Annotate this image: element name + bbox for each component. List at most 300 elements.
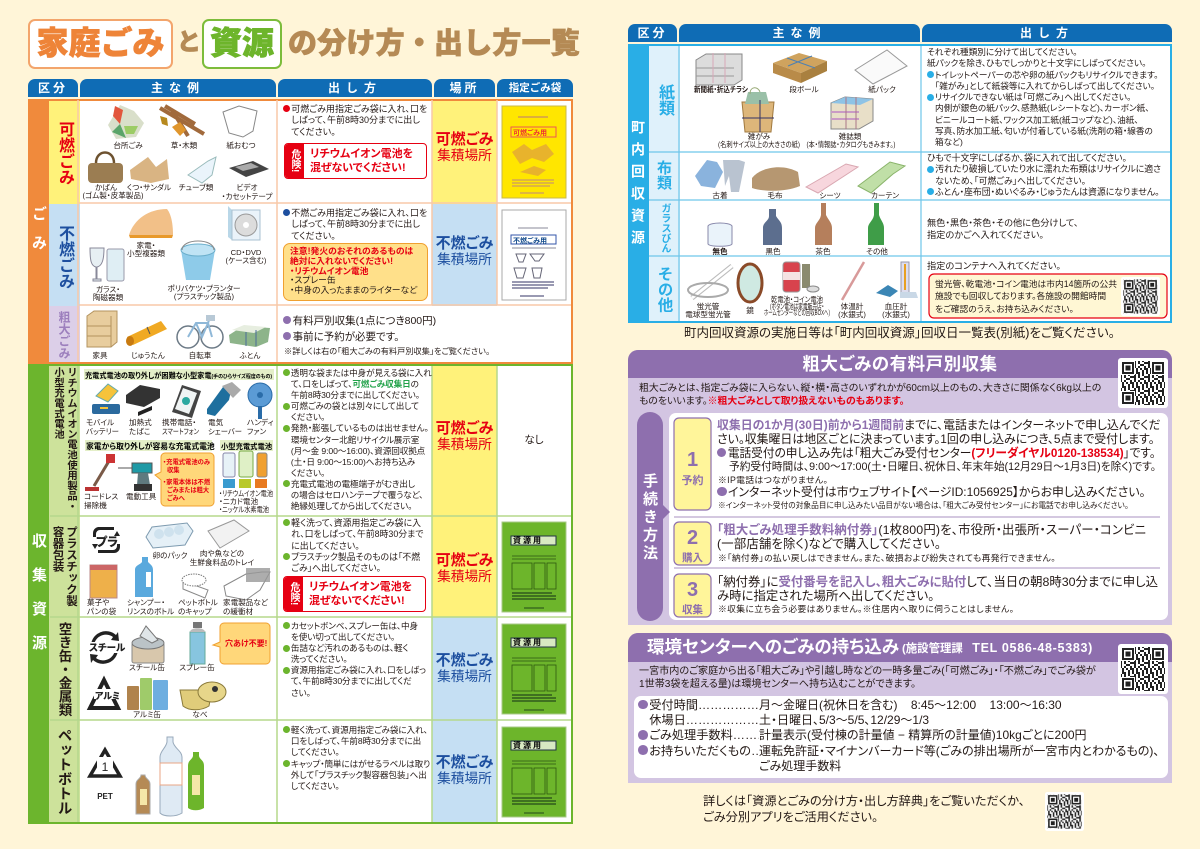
icon: steel mark <box>88 631 126 664</box>
place: plastic <box>436 552 493 584</box>
method: lithium: 絶縁処理してから出してください。 <box>291 501 412 511</box>
method: paper: 紙パックを除き、ひもでしっかりと十文字にしばってください。 <box>927 58 1146 68</box>
step 3 box <box>674 574 711 617</box>
illustration: carpet <box>126 321 167 360</box>
place: cans: 集積場所 <box>437 669 492 684</box>
illustration: kitchen waste <box>108 105 144 150</box>
warning: lithium <box>284 143 427 179</box>
caution box: ・スプレー缶 <box>290 275 336 285</box>
callout: rechargeable battery note: ・家電本体は不燃 <box>163 477 211 486</box>
step 3 note: ※収集に立ち会う必要はありません。※住居内へ取りに伺うことはしません。 <box>718 604 1014 614</box>
illustration: furniture <box>87 311 117 360</box>
illustration: mirror <box>738 264 762 315</box>
illustration: green glass bottle <box>866 203 888 256</box>
illustration: fluorescent tube <box>685 266 732 319</box>
bag: resource cans <box>502 624 566 714</box>
step 2 text <box>717 523 1146 551</box>
note: schedule: 町内回収資源の実施日等は「町内回収資源」回収日一覧表(別紙)をご覧ください。 <box>684 326 1115 340</box>
method: cans: を使い切って出してください。 <box>291 632 395 642</box>
label cell: oversized <box>49 306 80 362</box>
icon: steel mark: スチール <box>89 643 126 654</box>
method: lithium: ください。 <box>291 468 325 478</box>
callout text: fluorescent: 蛍光管、乾電池・コイン電池は市内14箇所の公共 <box>935 279 1117 289</box>
header: examples <box>679 24 920 42</box>
illustration: shampoo bottle: シャンプー・ <box>127 598 165 607</box>
illustration: futon <box>229 325 270 360</box>
place cell: plastic <box>432 516 497 617</box>
header: examples <box>80 79 276 97</box>
method: glass: 指定のかごへ入れてください。 <box>927 230 1044 240</box>
header bar <box>628 633 1172 662</box>
header: category: 区分 <box>637 26 668 40</box>
step 1 ip note: ※IP電話はつながりません。 <box>718 475 828 485</box>
text: oversized definition: ものをいいます。※粗大ごみとして取り扱えないものもあります。 <box>639 396 904 407</box>
header: bag <box>497 79 573 97</box>
step 2 box: 2 <box>687 527 698 549</box>
illustration: videotape: ・カセットテープ <box>222 192 273 201</box>
bag: resource pet: 資源用 <box>513 740 543 750</box>
procedure pill <box>637 412 663 621</box>
illustration: glass: ガラス・ <box>96 284 120 294</box>
header: category <box>628 24 677 42</box>
method: lithium: 午前8時30分までに出してください。 <box>291 390 420 400</box>
label cell: burnable <box>49 101 80 204</box>
method: plastic <box>283 518 424 573</box>
illustration: mobile battery: バッテリー <box>86 427 119 436</box>
callout: rechargeable battery note: 収集 <box>167 465 180 474</box>
title: and: と <box>177 29 201 56</box>
method: glass <box>927 218 1078 240</box>
method: cans: カセットボンベ、スプレー缶は、中身 <box>291 621 418 631</box>
illustration: bicycle: 自転車 <box>189 350 212 360</box>
illustration: newspaper: 新聞紙・折込チラシ <box>694 84 749 94</box>
illustration: sheets: シーツ <box>819 191 841 200</box>
right table header <box>628 24 1172 42</box>
illustration: mirror: 鏡 <box>746 305 754 315</box>
callout: fluorescent tubes note <box>929 274 1167 318</box>
illustration: thermometer: 体温計 <box>841 301 864 311</box>
procedure arrow <box>663 505 670 519</box>
place: non-burnable: 不燃ごみ <box>436 235 493 252</box>
method: lithium: (月〜金 9:00〜16:00)、資源回収拠点 <box>291 446 425 456</box>
illustration: magazines: (本・情報誌・カタログもきみます。) <box>806 139 896 149</box>
step 2 text: 「粗大ごみ処理手数料納付券」(1枚800円)を、市役所・出張所・スーパー・コンビニ <box>717 523 1146 537</box>
illustration: thermometer <box>838 262 866 319</box>
text: environment detail values: ごみ処理手数料 <box>759 759 841 773</box>
panel: oversized collection <box>628 350 1172 625</box>
warning tag: 危険! <box>288 582 299 606</box>
illustration: blanket: 毛布 <box>767 190 783 200</box>
illustration: shaver: シェーバー <box>208 427 242 436</box>
text: environment detail values: 運転免許証・マイナンバーカード等(ごみの排出場所が一宮市内とわかるもの)、 <box>759 744 1159 758</box>
header: examples: 主な例 <box>151 81 205 95</box>
lithium: subheading 3: 小型充電式電池 <box>221 442 273 451</box>
qr: app <box>1045 792 1084 831</box>
label cell: non-burnable <box>49 204 80 306</box>
bag: non-burnable <box>502 210 566 300</box>
method: cloth: ふとん・座布団・ぬいぐるみ・じゅうたんは資源になりません。 <box>935 187 1160 197</box>
header: place <box>434 79 495 97</box>
method: lithium: 可燃ごみの袋とは別々にして出して <box>291 401 419 411</box>
method: paper: 箱など) <box>935 137 963 147</box>
method: oversized: 事前に予約が必要です。 <box>293 331 399 343</box>
method: cans: 資源用指定ごみ袋に入れ、口をしばっ <box>291 665 426 675</box>
illustration: bucket: ポリバケツ・プランター <box>167 284 241 293</box>
icon: aluminium mark: アルミ <box>95 691 120 701</box>
method: cans: さい。 <box>291 688 311 698</box>
text: oversized definition <box>639 382 1101 407</box>
band: neighbourhood <box>628 44 650 323</box>
step 2 note: ※「納付券」の払い戻しはできません。また、破損および紛失されても再発行できません。 <box>718 553 1056 563</box>
header: examples: 主な例 <box>772 26 826 40</box>
illustration: old clothes: 古着 <box>712 190 728 200</box>
illustration: pet caps: ペットボトル <box>178 598 218 607</box>
text: environment detail values: 月〜金曜日(祝休日を含む) 8:45〜12:00 13:00〜16:30 <box>759 698 1062 712</box>
vertical label: glass: ガラスびん <box>659 203 670 253</box>
caution box: ・中身の入ったままのライターなど <box>290 285 417 295</box>
illustration: black glass bottle: 黒色 <box>765 246 781 256</box>
vertical label: plastic: 容器包装 <box>52 526 64 572</box>
method: non-burnable: 不燃ごみ用指定ごみ袋に入れ、口を <box>291 208 427 218</box>
method: cloth <box>927 153 1161 197</box>
illustration: food tray: 生鮮食料品のトレイ <box>190 557 254 567</box>
illustration: misc paper: 雑がみ <box>748 131 771 141</box>
text: environment intro: 一宮市内のご家庭から出る「粗大ごみ」や引越し時などの一時多量ごみ(「可燃ごみ」・「不燃ごみ」でごみ袋が <box>639 666 1096 677</box>
illustration: diaper <box>223 106 257 150</box>
caution box <box>283 243 428 301</box>
illustration: videotape: ビデオ <box>236 182 258 192</box>
bag: non-burnable: 不燃ごみ用 <box>513 236 547 245</box>
vertical label: neighbourhood: 町内回収資源 <box>630 120 646 252</box>
title <box>28 19 580 69</box>
illustration: aluminium cans: アルミ缶 <box>133 709 161 719</box>
header: how <box>922 24 1172 42</box>
title: household waste box: 家庭ごみ <box>36 25 164 61</box>
icon: PET mark <box>90 750 120 801</box>
heading: oversized: 粗大ごみの有料戸別収集 <box>802 354 998 374</box>
method: lithium: 透明な袋または中身が見える袋に入れ <box>291 368 432 378</box>
illustration: mobile battery: モバイル <box>86 418 115 427</box>
illustration: CD: CD・DVD <box>231 248 262 257</box>
illustration: pet caps: のキャップ <box>178 607 212 616</box>
illustration: newspaper <box>694 53 749 94</box>
heading: environment center: 環境センターへのごみの持ち込み <box>647 637 899 657</box>
illustration: videotape <box>222 161 273 201</box>
callout text: fluorescent <box>935 279 1117 314</box>
method: paper: 「雑がみ」として紙袋等に入れてからしばって出してください。 <box>935 81 1155 91</box>
illustration: magazines <box>806 97 896 149</box>
warning tag <box>283 576 303 612</box>
callout: rechargeable battery note <box>155 453 214 506</box>
method: pet: してください。 <box>291 747 340 757</box>
illustration: misc paper <box>718 88 800 149</box>
method: lithium <box>283 368 432 511</box>
vertical label: garbage: ごみ <box>30 206 47 264</box>
illustration: shampoo bottle: リンスのボトル <box>127 607 175 616</box>
illustration: brown glass bottle: 茶色 <box>815 246 831 256</box>
warning tag <box>284 143 304 179</box>
band: garbage <box>28 99 50 364</box>
illustration: handy fan <box>247 383 273 436</box>
header: place: 場所 <box>449 81 480 95</box>
step 3 text: 「納付券」に受付番号を記入し、粗大ごみに貼付して、当日の朝8時30分までに申し込 <box>717 575 1158 589</box>
callout text: fluorescent: をご確認のうえ、お持ち込みください。 <box>935 304 1074 314</box>
method: lithium: 発熱・膨張しているものは出せません。 <box>291 423 429 433</box>
method: paper: 内側が銀色の紙パック、感熱紙(レシートなど)、カーボン紙、 <box>935 103 1150 113</box>
place: burnable <box>436 131 493 163</box>
method: plastic: に出してください。 <box>291 541 360 551</box>
text: environment detail values <box>759 698 1159 773</box>
illustration: tube <box>178 157 216 192</box>
place: burnable: 可燃ごみ <box>436 131 493 148</box>
illustration: pet bottles <box>136 737 204 816</box>
illustration: blanket <box>752 167 800 200</box>
header: bag: 指定ごみ袋 <box>509 82 561 94</box>
illustration: magazines: 雑誌類 <box>839 131 862 141</box>
illustration: small batteries: ・ニカド電池 <box>219 496 258 506</box>
illustration: kitchen waste: 台所ごみ <box>113 140 143 150</box>
place cell: burnable <box>432 101 497 204</box>
step 1 hours: 予約受付時間は、9:00〜17:00(土・日曜日、祝休日、年末年始(12月29日〜1月3日)を除く)です。 <box>729 461 1156 473</box>
illustration: snack bag: 菓子や <box>87 597 109 607</box>
illustration: clear glass bottle: 無色 <box>712 246 728 256</box>
bag: resource cans: 資源用 <box>513 637 543 647</box>
illustration: cardboard <box>773 53 827 94</box>
place: lithium <box>436 420 493 452</box>
place: lithium: 可燃ごみ <box>436 420 493 437</box>
step 1 text <box>717 418 1161 446</box>
header: how <box>278 79 432 97</box>
illustration: small batteries: ・ニッケル水素電池 <box>219 504 269 514</box>
illustration: smartphone: 携帯電話・ <box>162 417 196 427</box>
illustration: glass: 陶磁器類 <box>93 292 124 302</box>
method: plastic: れ、口をしばって、午前8時30分まで <box>291 529 424 539</box>
illustration: brown glass bottle <box>815 203 832 256</box>
step 1 internet: インターネット受付は市ウェブサイト【ページID:1056925】からお申し込みください。 <box>728 485 1146 499</box>
place cell: non-burnable <box>432 204 497 306</box>
place cell: lithium <box>432 366 497 516</box>
method: paper <box>927 47 1158 147</box>
method: pet: キャップ・簡単にはがせるラベルは取り <box>291 759 430 769</box>
panel: resources section <box>28 364 573 824</box>
illustration: small batteries <box>219 451 273 514</box>
header: category: 区分 <box>38 81 68 95</box>
illustration: old clothes <box>695 160 745 200</box>
illustration: clear glass bottle <box>708 223 732 256</box>
method: paper: ビニールコート紙、ワックス加工紙(紙コップなど)、油紙、 <box>935 115 1139 125</box>
place: pet: 不燃ごみ <box>436 754 493 771</box>
method: pet: 口をしばって、午前8時30分までに出 <box>291 736 421 746</box>
illustration: blood pressure meter: 血圧計 <box>885 301 908 311</box>
illustration: snack bag <box>87 565 117 616</box>
method: non-burnable: てください。 <box>291 231 336 241</box>
illustration: aluminium cans <box>127 678 168 719</box>
vertical label: cans: 空き缶・金属類 <box>56 622 72 716</box>
step 3 box: 収集 <box>682 603 703 616</box>
method: other: 指定のコンテナへ入れてください。 <box>927 261 1061 271</box>
place: pet: 集積場所 <box>437 771 492 786</box>
illustration: misc paper: (名刺サイズ以上の大きさの紙) <box>718 139 800 149</box>
place: pet <box>436 754 493 786</box>
illustration: CD: (ケース含む) <box>226 256 267 265</box>
label cell: resources <box>49 366 80 822</box>
place: plastic: 集積場所 <box>437 569 492 584</box>
step 1 box: 1 <box>687 449 698 471</box>
illustration: pot <box>180 682 226 719</box>
vertical label: paper: 紙類 <box>656 84 673 116</box>
method: lithium: 環境センター北館リサイクル展示室 <box>291 435 419 445</box>
band: resources <box>28 364 50 824</box>
text: environment detail values: 土・日曜日、5/3〜5/5、12/29〜1/3 <box>759 713 929 727</box>
illustration: blood pressure meter: (水銀式) <box>882 309 910 319</box>
heading: contact: (施設管理課 TEL 0586-48-5383) <box>902 641 1093 655</box>
method: pet <box>283 725 430 791</box>
illustration: spray can <box>179 622 215 672</box>
method: non-burnable <box>283 208 427 241</box>
illustration: cordless cleaner: コードレス <box>84 492 118 501</box>
illustration: batteries: ホームセンターなどの回収BOXへ) <box>764 308 830 317</box>
callout: rechargeable battery note: ごみへ <box>167 493 186 502</box>
lithium: subheading 1: 充電式電池の取り外しが困難な小型家電(手のひらサイズ程度のもの) <box>85 370 272 380</box>
header: category <box>28 79 78 97</box>
method: oversized <box>283 315 436 343</box>
illustration: egg carton: 卵のパック <box>153 550 187 560</box>
illustration: cordless cleaner <box>84 454 118 510</box>
method: pet: 軽く洗って、資源用指定ごみ袋に入れ、 <box>291 725 428 735</box>
vertical label: lithium: 小型充電式電池 <box>52 367 63 439</box>
step 1 text: 収集日の1か月(30日)前から1週間前までに、電話またはインターネットで申し込んでくだ <box>717 418 1161 432</box>
caution box: ・リチウムイオン電池 <box>290 266 368 276</box>
footer text: 詳しくは「資源とごみの分け方・出し方辞典」をご覧いただくか、 <box>703 794 1025 808</box>
text: environment detail labels <box>638 698 759 758</box>
illustration: packing material: 家電製品など <box>223 597 269 607</box>
illustration: cardboard: 段ボール <box>789 85 819 94</box>
icon: PET mark: PET <box>97 792 113 801</box>
illustration: pot: なべ <box>192 710 208 719</box>
illustration: smartphone <box>162 385 201 436</box>
illustration: food tray <box>190 520 254 567</box>
illustration: food tray: 肉や魚などの <box>200 548 244 558</box>
method: plastic: ごみ」へ出してください。 <box>291 563 381 573</box>
vertical label: plastic <box>52 526 78 606</box>
illustration: handy fan: ハンディ <box>247 417 273 427</box>
method: lithium: て、口をしばって、可燃ごみ収集日の <box>291 379 419 389</box>
illustration: bag: かばん <box>95 183 118 192</box>
illustration: heated tobacco: たばこ <box>129 427 150 436</box>
method: burnable: てください。 <box>291 127 336 137</box>
bag: none: なし <box>524 434 544 446</box>
step 1 box <box>674 418 711 510</box>
illustration: shampoo bottle <box>127 557 175 616</box>
illustration: packing material <box>223 568 270 616</box>
illustration: packing material: の緩衝材 <box>223 606 254 616</box>
illustration: green glass bottle: その他 <box>866 246 888 256</box>
method: glass: 無色・黒色・茶色・その他に色分けして、 <box>927 218 1078 228</box>
white inner panel <box>669 413 1168 620</box>
method: paper: それぞれ種類別に分けて出してください。 <box>927 47 1077 57</box>
illustration: shaver <box>207 382 242 436</box>
illustration: shoes <box>127 157 172 192</box>
illustration: shaver: 電気 <box>208 417 224 427</box>
illustration: sheets <box>806 164 858 200</box>
illustration: steel can <box>129 626 165 672</box>
warning text: 混ぜないでください! <box>309 594 405 606</box>
place: lithium: 集積場所 <box>437 437 492 452</box>
illustration: black glass bottle <box>763 209 782 256</box>
method: cloth: ないため、「可燃ごみ」へ出してください。 <box>935 176 1086 186</box>
illustration: batteries: (ボタン電池は家電販売店・ <box>770 301 824 311</box>
illustration: spray can: スプレー缶 <box>179 662 215 672</box>
method: cans: て、午前8時30分までに出してくだ <box>291 676 412 686</box>
callout text: fluorescent: 施設でも回収しております。各施設の開館時間 <box>935 291 1106 301</box>
method: burnable <box>283 104 427 137</box>
warning text <box>309 580 412 606</box>
qr: environment center <box>1118 644 1168 694</box>
method: non-burnable: しばって、午前8時30分までに出し <box>291 219 420 229</box>
step 1 box: 予約 <box>682 473 704 487</box>
warning text: リチウムイオン電池を <box>310 148 413 160</box>
place: non-burnable: 集積場所 <box>437 252 492 267</box>
step 2 text: (一部店舗を除く)などで購入してください。 <box>717 537 941 551</box>
illustration: smartphone: スマートフォン <box>162 427 199 436</box>
illustration: thermometer: (水銀式) <box>838 309 866 319</box>
caution box: 注意!発火のおそれのあるものは <box>290 246 413 256</box>
place cell: cans <box>432 617 497 720</box>
illustration: bag: (ゴム製・皮革製品) <box>82 190 144 200</box>
illustration: fluorescent tube: 蛍光管 <box>697 301 720 311</box>
icon: plastic recycling mark: プラ <box>96 535 118 549</box>
illustration: furniture: 家具 <box>92 350 108 360</box>
step 1 text: さい。収集曜日は地区ごとに決まっています。1回の申し込みにつき、5点まで受付します。 <box>717 432 1155 446</box>
warning tag: 危険! <box>289 149 300 173</box>
warning: lithium 2 <box>283 576 426 612</box>
panel: environment center <box>628 633 1172 783</box>
callout: no need to puncture: 穴あけ不要! <box>225 638 267 648</box>
icon: PET mark: 1 <box>102 760 109 774</box>
method: paper: 写真、防水加工紙、匂いが付着している紙(洗剤の箱・線香の <box>935 126 1153 136</box>
method: cans: 洗ってください。 <box>291 654 347 664</box>
step 2 box <box>674 522 711 565</box>
bag: resource pet <box>502 727 566 817</box>
vertical label: burnable: 可燃ごみ <box>56 121 73 185</box>
illustration: milk carton <box>855 50 907 94</box>
header: how: 出し方 <box>328 81 382 95</box>
title: resources box <box>202 19 282 69</box>
illustration: batteries <box>764 262 830 317</box>
place cell: pet <box>432 720 497 822</box>
place: non-burnable <box>436 235 493 267</box>
illustration: carpet: じゅうたん <box>131 351 165 360</box>
illustration: glass <box>90 248 124 302</box>
illustration: steel can: スチール缶 <box>129 662 165 672</box>
pill label: procedure: 手続き方法 <box>641 473 658 563</box>
step 1 internet note: ※インターネット受付の対象品目に申し込みたい品目がない場合は、「粗大ごみ受付センター」にお電話でお申し込みください。 <box>718 501 1129 510</box>
illustration: egg carton <box>146 523 193 560</box>
illustration: pet caps <box>178 574 218 616</box>
panel: neighbourhood recycling section <box>628 44 1172 323</box>
white inner panel <box>634 696 1168 778</box>
callout: rechargeable battery note: ・充電式電池のみ <box>163 457 211 466</box>
vertical label: resources: 収集資源 <box>30 533 47 669</box>
vertical label: lithium <box>52 367 78 511</box>
title: resources box: 資源 <box>210 25 274 61</box>
illustration: tube: チューブ類 <box>178 182 214 192</box>
method: oversized: 有料戸別収集(1点につき800円) <box>293 315 436 327</box>
method: plastic: プラスチック製品そのものは「不燃 <box>291 552 420 562</box>
warning text: リチウムイオン電池を <box>309 581 412 593</box>
vertical label: other: その他 <box>656 266 672 312</box>
illustration: shoes: くつ・サンダル <box>127 182 172 192</box>
